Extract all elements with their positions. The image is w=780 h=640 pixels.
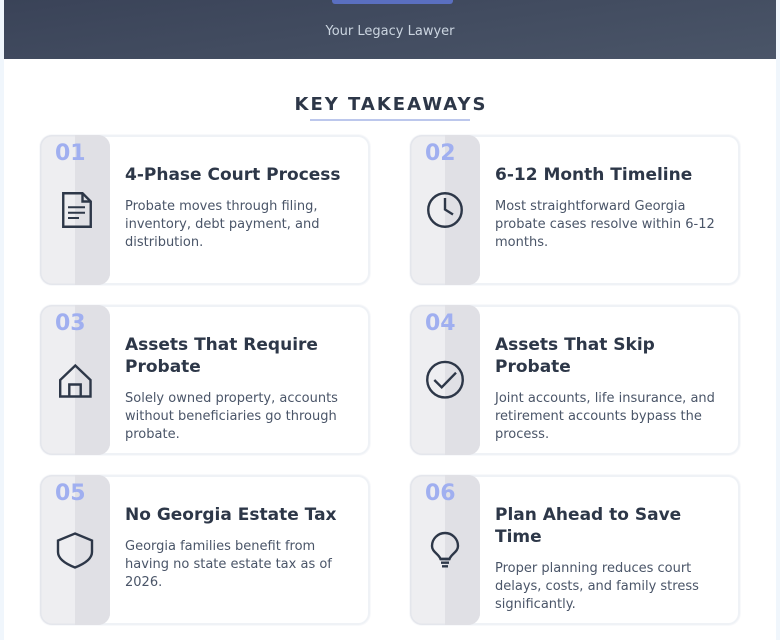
description 05: Georgia families benefit from	[125, 539, 315, 554]
title 05: No Georgia Estate Tax	[125, 505, 337, 525]
description 03	[125, 391, 338, 442]
description 06: significantly.	[495, 597, 576, 612]
description 05: 2026.	[125, 575, 162, 590]
description 04	[494, 391, 715, 442]
card 02	[410, 135, 740, 285]
description 05: having no state estate tax as of	[125, 557, 332, 572]
description 02	[495, 199, 715, 250]
description 01	[125, 199, 320, 250]
number 06: 06	[425, 481, 456, 506]
number 03: 03	[55, 311, 86, 336]
description 06: delays, costs, and family stress	[495, 579, 699, 594]
heading: key takeaways: KEY TAKEAWAYS	[294, 94, 487, 115]
icon: check circle	[426, 360, 464, 399]
number 02: 02	[425, 141, 456, 166]
sidebar 03	[40, 305, 110, 455]
number 05: 05	[55, 481, 86, 506]
card 05	[40, 475, 370, 625]
title 03: Assets That Require	[125, 335, 318, 355]
tagline: Your Legacy Lawyer	[326, 24, 454, 39]
icon: house	[59, 364, 92, 398]
description 02: Most straightforward Georgia	[495, 199, 686, 214]
title 06: Plan Ahead to Save	[495, 505, 681, 525]
sidebar 02	[410, 135, 480, 285]
description 03: probate.	[125, 427, 180, 442]
description 06	[495, 561, 699, 612]
sidebar 04	[410, 305, 480, 455]
description 05	[125, 539, 332, 590]
icon: shield	[56, 532, 94, 569]
icon: clock	[427, 192, 463, 228]
title 03	[125, 335, 318, 377]
description 03: without beneficiaries go through	[125, 409, 337, 424]
title 03: Probate	[125, 357, 201, 377]
number 01: 01	[55, 141, 86, 166]
description 04: retirement accounts bypass the	[495, 409, 702, 424]
description 03: Solely owned property, accounts	[125, 391, 338, 406]
title 04: Probate	[495, 357, 571, 377]
icon: light bulb	[430, 532, 460, 568]
title 06: Time	[495, 527, 542, 547]
description 01: distribution.	[125, 235, 203, 250]
sidebar 05	[40, 475, 110, 625]
title 04: Assets That Skip	[495, 335, 655, 355]
title 06	[495, 505, 681, 547]
title 04	[495, 335, 655, 377]
number 04: 04	[425, 311, 456, 336]
description 01: Probate moves through filing,	[125, 199, 318, 214]
card 06	[410, 475, 740, 625]
description 04: process.	[495, 427, 549, 442]
sidebar 06	[410, 475, 480, 625]
description 02: probate cases resolve within 6-12	[495, 217, 715, 232]
description 02: months.	[495, 235, 548, 250]
card 01	[40, 135, 370, 285]
description 04: Joint accounts, life insurance, and	[495, 391, 715, 406]
title 02: 6-12 Month Timeline	[495, 165, 692, 185]
description 06: Proper planning reduces court	[495, 561, 691, 576]
accent bar	[332, 0, 452, 4]
card 03	[40, 305, 370, 455]
card 04	[410, 305, 740, 455]
description 01: inventory, debt payment, and	[125, 217, 320, 232]
icon: document	[62, 192, 92, 228]
sidebar 01	[40, 135, 110, 285]
title 01: 4-Phase Court Process	[125, 165, 341, 185]
header banner	[4, 0, 776, 59]
heading underline	[310, 119, 470, 121]
